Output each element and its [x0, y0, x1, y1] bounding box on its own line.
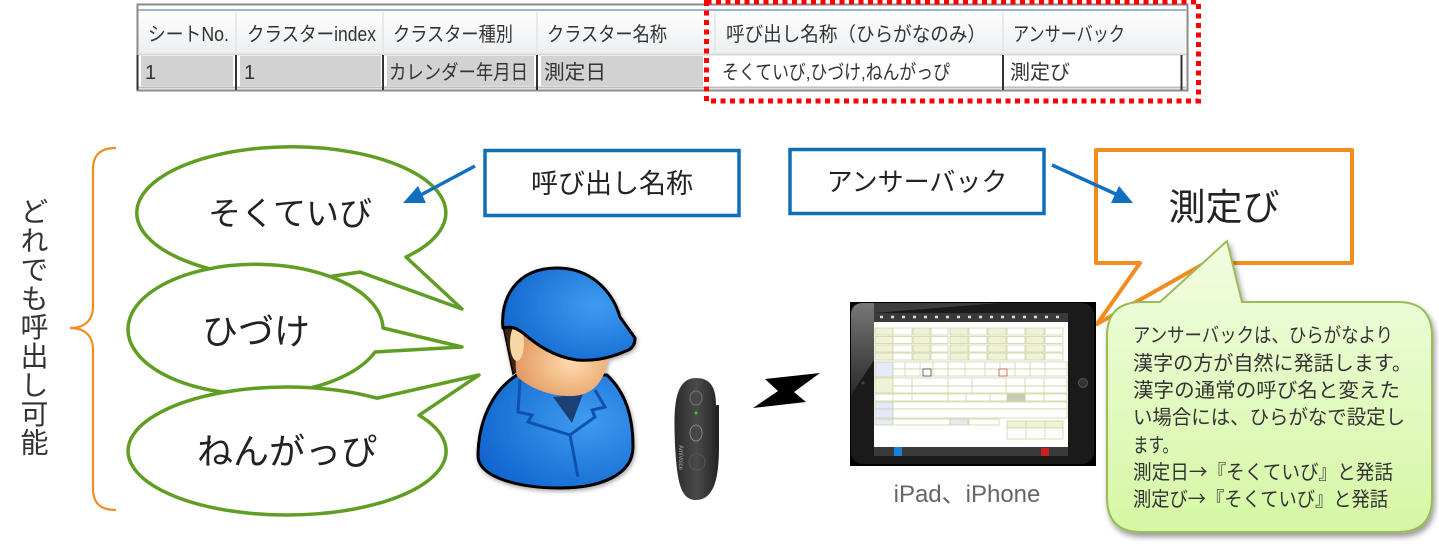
note callout: green: 漢字の方が自然に発話します。 — [1133, 347, 1412, 376]
note callout: green — [1107, 241, 1432, 532]
table: cluster settings: 測定び — [1010, 61, 1070, 84]
arrow: to answer back — [1052, 165, 1133, 203]
label box: アンサーバック — [790, 150, 1044, 214]
table: cluster settings — [138, 4, 1188, 90]
answer back bubble — [1096, 150, 1352, 324]
note callout: green: い場合には、ひらがなで設定し — [1133, 401, 1405, 430]
speech bubble: ひづけ: ひづけ — [202, 311, 310, 352]
table: cluster settings: 呼び出し名称（ひらがなのみ） — [726, 23, 986, 46]
table: cluster settings: クラスター名称 — [547, 23, 667, 46]
note callout: green: アンサーバックは、ひらがなより — [1133, 319, 1393, 348]
arrow: to bubble — [403, 166, 475, 203]
label box: 呼び出し名称: 呼び出し名称 — [531, 169, 693, 199]
tablet caption: iPad、iPhone — [894, 481, 1040, 508]
label box: 呼び出し名称 — [485, 150, 739, 216]
table: cluster settings: 測定日 — [544, 61, 606, 84]
highlight: red dotted frame — [706, 2, 1198, 101]
note callout: green: 測定日→『そくていび』と発話 — [1133, 456, 1393, 485]
answer back bubble: 測定び — [1168, 187, 1280, 228]
icon: voice device: AmiVoice — [677, 445, 683, 471]
table: cluster settings: そくていび,ひづけ,ねんがっぴ — [722, 61, 950, 84]
table: cluster settings: シートNo. — [148, 24, 229, 46]
speech bubble: ひづけ — [128, 264, 462, 394]
table: cluster settings: カレンダー年月日 — [389, 61, 528, 84]
table: cluster settings: 1 — [244, 62, 255, 84]
tablet — [850, 302, 1096, 466]
brace: orange — [70, 148, 116, 510]
speech bubble: そくていび — [137, 147, 462, 309]
speech bubble: そくていび: そくていび — [208, 195, 372, 232]
note callout: green: 測定び→『そくていび』と発話 — [1133, 483, 1388, 512]
label box: アンサーバック: アンサーバック — [827, 167, 1007, 197]
table: cluster settings: 1 — [145, 62, 156, 84]
table: cluster settings: アンサーバック — [1013, 23, 1125, 46]
speech bubble: ねんがっぴ — [128, 375, 479, 515]
icon: voice device — [674, 378, 719, 500]
table: cluster settings: クラスター種別 — [393, 23, 513, 46]
table: cluster settings: クラスターindex — [247, 23, 376, 46]
note callout: green: 漢字の通常の呼び名と変えた — [1133, 374, 1400, 403]
speech bubble: ねんがっぴ: ねんがっぴ — [197, 431, 377, 472]
icon: lightning bolt — [753, 373, 820, 408]
vertical label: どれでも呼出し可能 — [18, 197, 48, 456]
note callout: green: ます。 — [1133, 429, 1178, 458]
icon: worker — [478, 268, 635, 488]
